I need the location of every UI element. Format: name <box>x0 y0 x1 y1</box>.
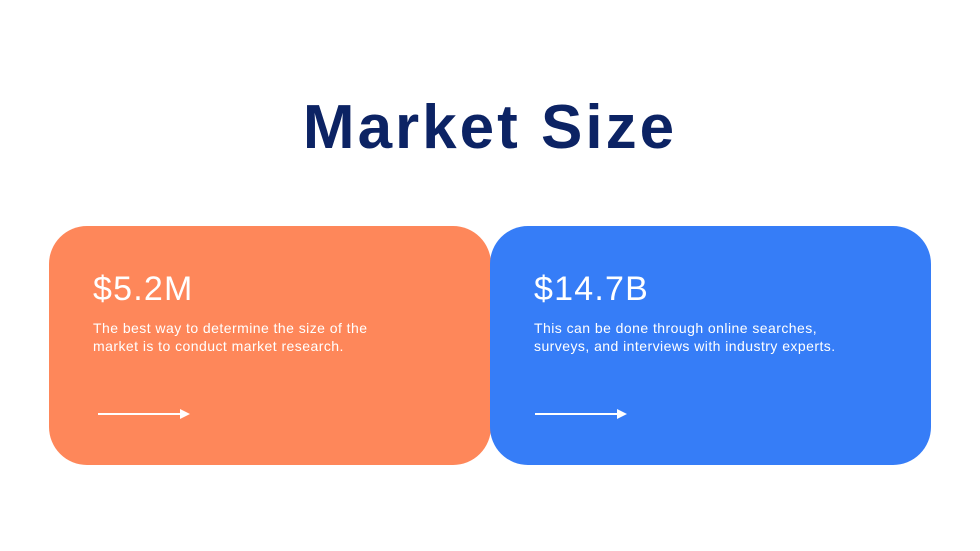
panel: orange card <box>49 226 491 465</box>
description: This can be done through online searches, surveys, and interviews with industry experts. <box>534 320 836 354</box>
value: $5.2M <box>93 270 194 308</box>
value: $14.7B <box>534 270 649 308</box>
arrow <box>535 409 627 419</box>
panel: blue card <box>490 226 931 465</box>
arrow <box>98 409 190 419</box>
title: Market Size <box>303 93 677 162</box>
description: The best way to determine the size of the market is to conduct market research. <box>93 320 367 354</box>
